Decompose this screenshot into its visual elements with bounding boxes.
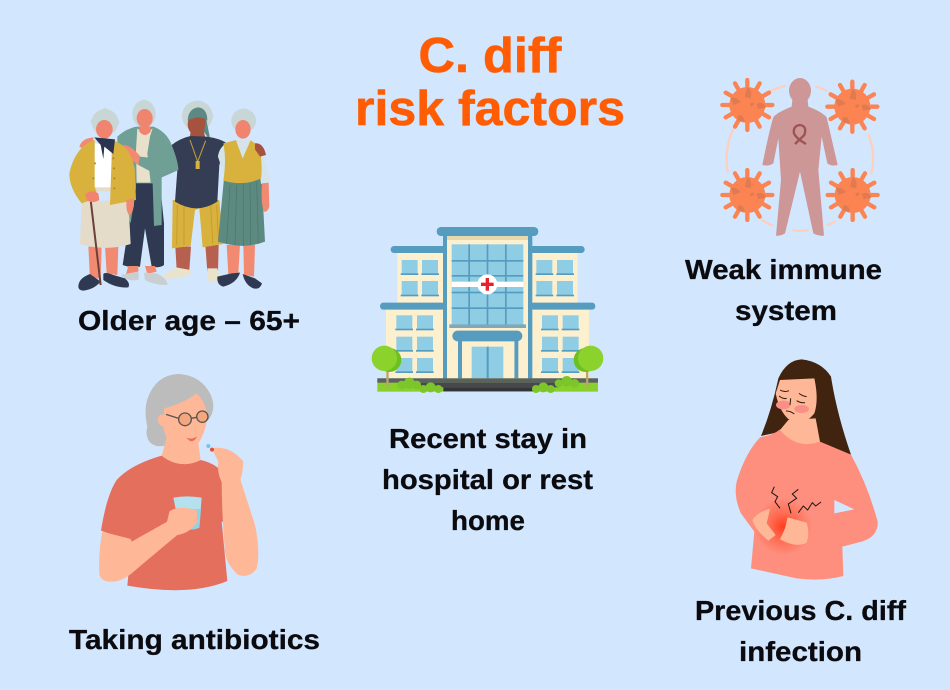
label: previous infection: Previous C. diff bbox=[695, 595, 907, 626]
person: woman with dark top and yellow shorts bbox=[164, 101, 227, 282]
hospital entrance bbox=[452, 331, 522, 378]
pain lines bbox=[772, 487, 821, 513]
title: risk factors bbox=[355, 82, 625, 136]
shirt bbox=[101, 456, 254, 590]
label: immune system: system bbox=[735, 295, 837, 326]
human figure bbox=[762, 78, 838, 236]
label: hospital bbox=[382, 423, 593, 536]
hair bbox=[761, 359, 851, 455]
label: hospital: home bbox=[451, 505, 525, 536]
ribbon bbox=[794, 125, 806, 144]
label: antibiotics: Taking antibiotics bbox=[69, 624, 320, 655]
label: older age: Older age – 65+ bbox=[78, 305, 300, 336]
label: previous infection: infection bbox=[739, 636, 862, 667]
left wings bbox=[380, 246, 446, 378]
right hand bbox=[780, 517, 808, 545]
left hand bbox=[752, 509, 776, 541]
label: immune system: Weak immune bbox=[685, 254, 882, 285]
right wings bbox=[530, 246, 595, 378]
illustration: group of older people bbox=[69, 100, 271, 291]
label: previous infection bbox=[695, 595, 907, 667]
hand with pill bbox=[212, 448, 243, 482]
neck and face bbox=[776, 378, 820, 444]
pill bbox=[206, 444, 214, 452]
illustration: hospital bbox=[372, 227, 603, 393]
bushes bbox=[397, 376, 579, 393]
sweater bbox=[736, 429, 878, 580]
left arm bbox=[99, 521, 177, 582]
dashed ring bbox=[727, 86, 873, 231]
glasses bbox=[166, 411, 208, 426]
mouth bbox=[186, 436, 197, 441]
stomach glow bbox=[755, 498, 812, 555]
glass of water bbox=[173, 496, 202, 530]
person: woman with yellow vest and green skirt bbox=[217, 109, 271, 289]
illustration: woman with stomach pain bbox=[736, 359, 878, 580]
title bbox=[355, 29, 625, 136]
label: immune system bbox=[685, 254, 882, 326]
raised arm bbox=[222, 478, 258, 576]
label: hospital: Recent stay in bbox=[389, 423, 587, 454]
trees bbox=[372, 346, 603, 387]
neck and face bbox=[158, 393, 207, 464]
central tower bbox=[437, 227, 538, 380]
hair bbox=[146, 374, 213, 446]
label: hospital: hospital or rest bbox=[382, 464, 593, 495]
title: C. diff bbox=[418, 29, 562, 83]
ground and steps bbox=[377, 378, 598, 392]
person: woman with green cardigan bbox=[117, 100, 178, 285]
cheeks bbox=[776, 401, 809, 413]
illustration: older woman taking a pill bbox=[99, 374, 258, 590]
illustration: body surrounded by viruses bbox=[722, 78, 878, 236]
facial features bbox=[779, 390, 807, 414]
person: woman with yellow jacket and cane bbox=[69, 108, 136, 291]
hand with glass bbox=[167, 508, 197, 535]
viruses bbox=[722, 80, 878, 220]
